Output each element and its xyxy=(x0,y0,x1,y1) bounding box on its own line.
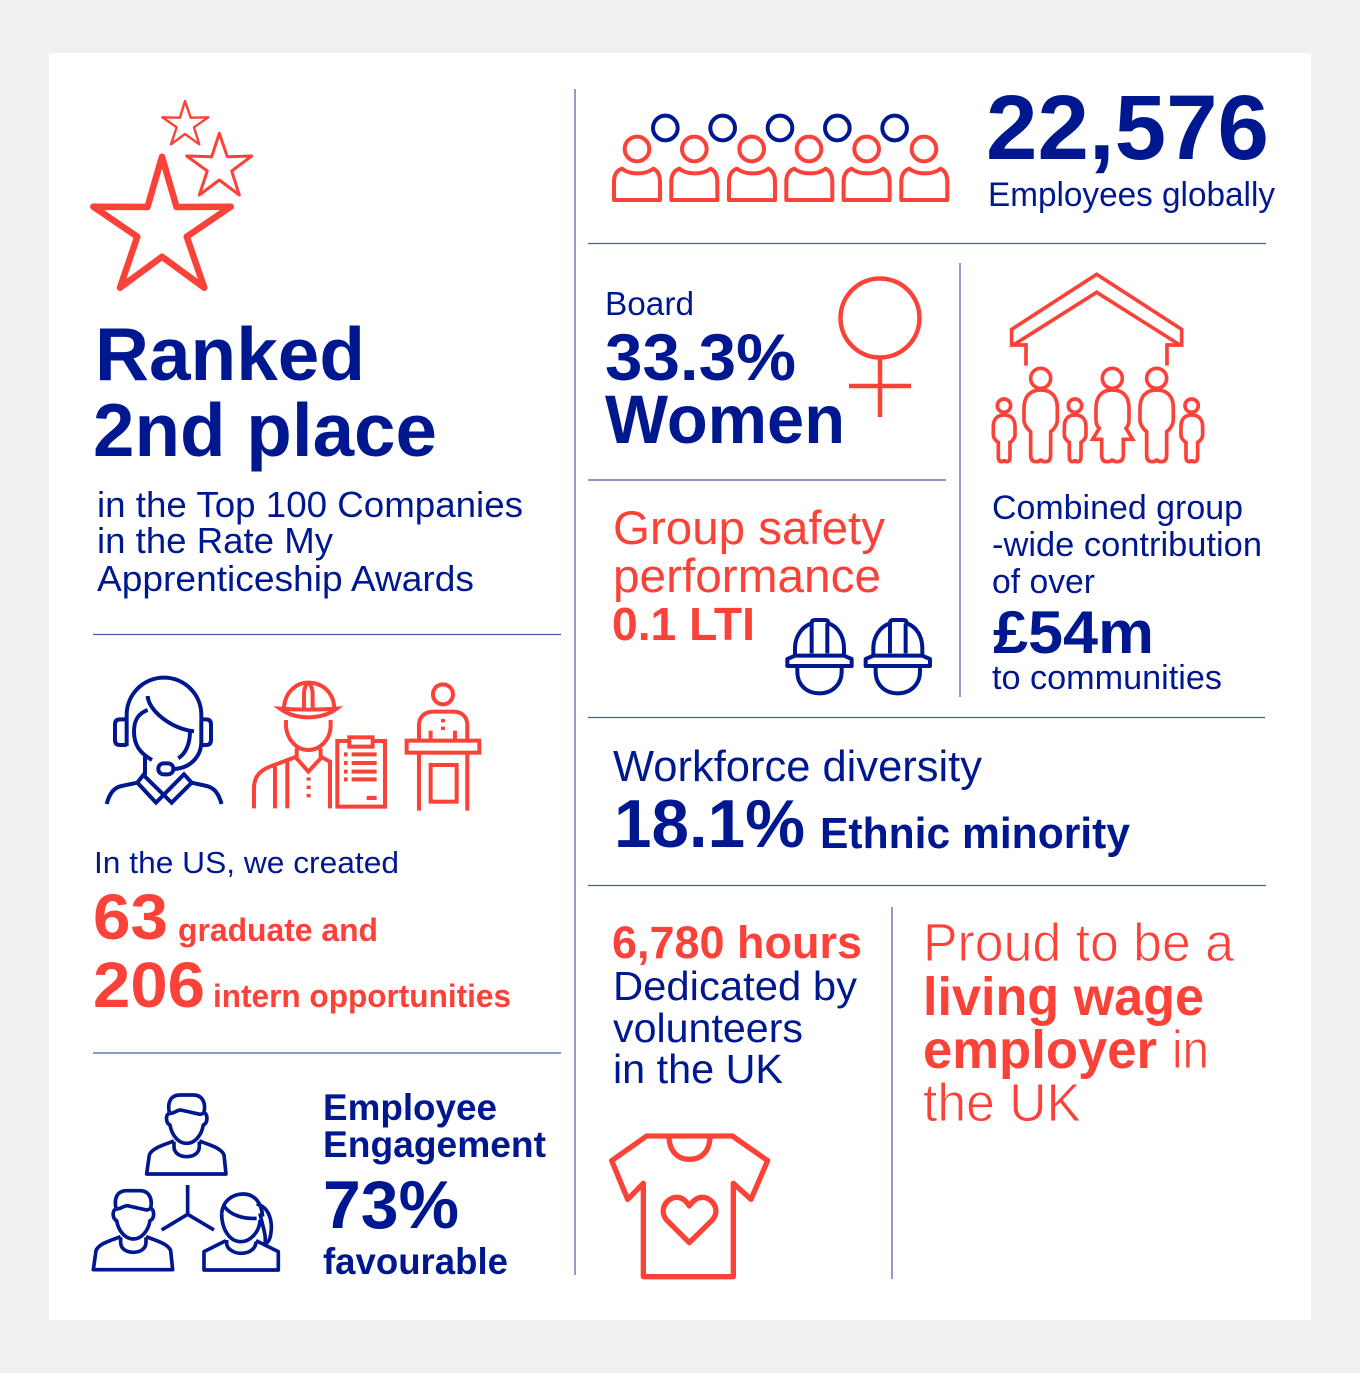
panel: board women xyxy=(605,278,920,458)
text: ethnic minority: Ethnic minority xyxy=(820,809,1131,858)
heading: employee engagement: Employee xyxy=(323,1087,497,1128)
panel: community contribution xyxy=(992,274,1262,697)
text: the UK: the UK xyxy=(923,1073,1081,1133)
stat: 206 intern: 206 xyxy=(93,949,205,1021)
heading: group safety performance: Group safety xyxy=(613,501,885,554)
text: combined group-wide contribution: -wide contribution xyxy=(992,526,1262,564)
text: living wage: living wage xyxy=(923,967,1204,1027)
text: award description: Apprenticeship Awards xyxy=(97,558,474,599)
stat: £54m: £54m xyxy=(993,599,1154,666)
text: dedicated by volunteers: volunteers xyxy=(613,1005,803,1051)
text: award description: in the Rate My xyxy=(97,520,333,561)
heading: employee engagement xyxy=(323,1087,546,1165)
text: dedicated by volunteers: Dedicated by xyxy=(613,963,857,1009)
text: dedicated by volunteers: in the UK xyxy=(613,1046,783,1092)
text: in the US: In the US, we created xyxy=(94,845,399,880)
panel: employee engagement xyxy=(93,1087,546,1282)
stat: 206 intern xyxy=(93,949,511,1021)
icon: site worker with clipboard xyxy=(254,683,385,808)
icon: connected team xyxy=(93,1095,278,1270)
panel: US opportunities xyxy=(93,678,511,1021)
heading: employee engagement: Engagement xyxy=(323,1124,546,1165)
icon: crowd of people xyxy=(614,116,947,200)
stat: 18.1%: 18.1% xyxy=(614,786,805,862)
icon: call centre woman xyxy=(107,678,222,804)
text: award description xyxy=(97,484,523,599)
icon: two hard hats xyxy=(787,620,930,693)
text: employees globally: Employees globally xyxy=(988,176,1275,214)
text: board: Board xyxy=(605,285,694,322)
stat: 63 graduate: 63 xyxy=(93,881,168,953)
icon: family under roof xyxy=(993,274,1203,462)
text: award description: in the Top 100 Companies xyxy=(97,484,523,525)
text: employer in: in xyxy=(1172,1020,1209,1080)
panel: living wage xyxy=(923,913,1235,1133)
heading: group safety performance xyxy=(613,501,885,602)
text: to communities: to communities xyxy=(992,659,1222,697)
stat: 73%: 73% xyxy=(323,1167,459,1243)
panel: workforce diversity xyxy=(613,742,1131,862)
panel: ranked 2nd place xyxy=(93,101,523,599)
text: combined group-wide contribution: Combined group xyxy=(992,489,1243,527)
heading: Ranked 2nd place: 2nd place xyxy=(93,388,437,472)
icon: t-shirt with heart xyxy=(612,1136,768,1277)
panel: employees globally xyxy=(614,77,1275,214)
panel: group safety xyxy=(612,501,930,693)
heading: workforce diversity: Workforce diversity xyxy=(613,742,982,791)
stat: 63 graduate: graduate and xyxy=(178,912,378,948)
icon: speaker at podium xyxy=(407,684,479,811)
stat: 22,576: 22,576 xyxy=(986,77,1269,179)
text: dedicated by volunteers xyxy=(613,963,857,1092)
stat: 0.1 LTI: 0.1 LTI xyxy=(612,598,755,650)
panel: volunteering xyxy=(612,917,862,1277)
stat: 206 intern: intern opportunities xyxy=(213,978,511,1014)
heading: group safety performance: performance xyxy=(613,549,881,602)
text: women: Women xyxy=(605,381,845,458)
heading: Ranked 2nd place xyxy=(93,312,437,472)
heading: Ranked 2nd place: Ranked xyxy=(95,312,365,396)
stat: 63 graduate xyxy=(93,881,378,953)
text: employer in: employer xyxy=(923,1020,1157,1080)
icon: female symbol xyxy=(840,278,920,417)
stat: 33.3%: 33.3% xyxy=(605,320,796,394)
stat: 6,780 hours: 6,780 hours xyxy=(612,917,862,968)
text: favourable: favourable xyxy=(323,1241,508,1282)
text: combined group-wide contribution xyxy=(992,489,1262,601)
text: proud to be a: Proud to be a xyxy=(923,913,1235,973)
text: combined group-wide contribution: of over xyxy=(992,563,1095,601)
icon: three stars xyxy=(93,101,252,288)
